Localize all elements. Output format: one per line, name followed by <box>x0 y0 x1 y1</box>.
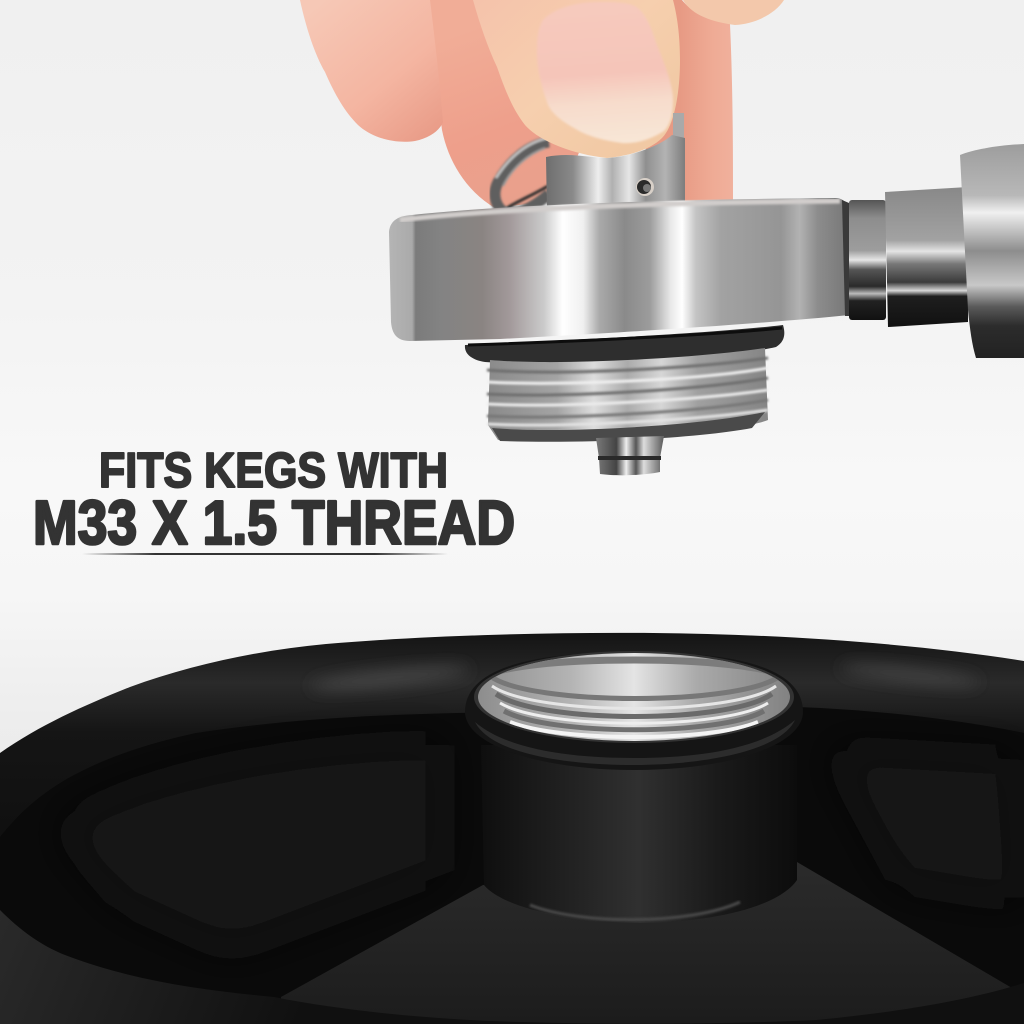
finger: upper right fingertip <box>683 0 784 25</box>
disc notch shadow <box>842 200 851 316</box>
connector collar <box>849 200 886 320</box>
finger: ring finger behind valve <box>640 0 733 210</box>
collar front highlight <box>475 720 795 765</box>
heading line two: M33 X 1.5 THREAD <box>33 489 515 558</box>
stem pull tab <box>673 113 684 203</box>
keg collar <box>465 652 803 770</box>
thread body <box>488 348 768 440</box>
keg neck <box>481 745 797 923</box>
stem vent hole <box>636 178 654 196</box>
thread base flange <box>492 412 765 442</box>
keg interior <box>0 707 1024 1024</box>
interior lit patches <box>60 745 1020 950</box>
finger: index finger <box>300 0 443 142</box>
stainless steel disc <box>389 198 851 341</box>
disc side <box>389 198 850 341</box>
threaded section <box>487 348 768 442</box>
black o-ring <box>465 325 784 364</box>
heading underline <box>82 553 448 555</box>
connector housing <box>960 144 1024 358</box>
hand holding the valve <box>300 0 784 213</box>
valve pin <box>596 436 664 475</box>
heading line one: FITS KEGS WITH <box>99 444 448 498</box>
finger: middle finger <box>428 0 600 208</box>
adjustable arm connector <box>849 144 1024 358</box>
keg rim <box>0 633 1024 1024</box>
connector body <box>885 187 968 327</box>
thread ridges <box>487 358 768 425</box>
heading text <box>33 444 515 558</box>
rim highlights <box>310 662 980 693</box>
keg front lip <box>0 910 1024 1024</box>
thumb <box>473 0 680 158</box>
stem cylinder <box>546 135 685 214</box>
disc top edge <box>400 201 840 220</box>
neck lit edge <box>530 902 740 920</box>
keg cone <box>281 862 1012 1024</box>
valve stem <box>546 113 685 214</box>
keg threaded opening <box>478 653 790 741</box>
collar inner bevel <box>474 651 794 743</box>
keg <box>0 633 1024 1024</box>
key ring <box>495 138 549 213</box>
thumbnail <box>537 2 673 143</box>
